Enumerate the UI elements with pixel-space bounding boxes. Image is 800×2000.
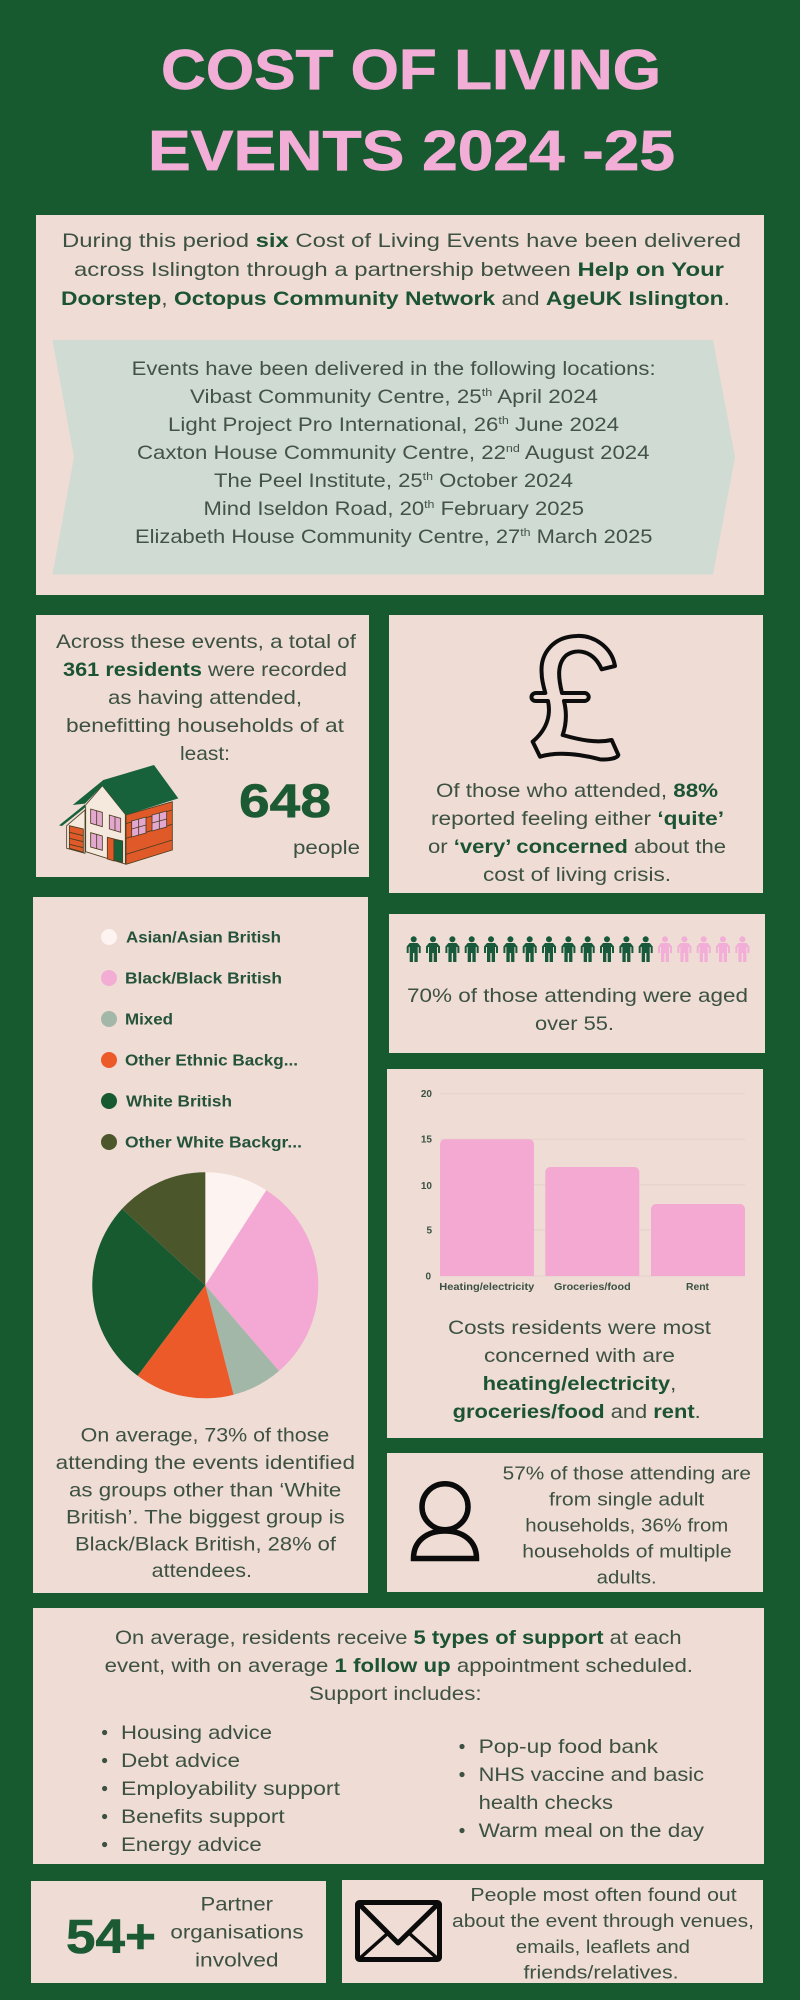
age text (407, 985, 748, 1035)
arrow banner: event locations: March 2025 (531, 526, 653, 548)
household text (503, 1462, 751, 1587)
concern text (428, 780, 726, 886)
support list: left column: Benefits support (121, 1806, 285, 1828)
found out text: friends/relatives. (524, 1962, 679, 1983)
support intro text: Support includes: (309, 1683, 482, 1705)
stat: 648 people: people (293, 837, 360, 859)
arrow banner: event locations: Vibast Community Centre, 25 (190, 386, 444, 408)
found out text: People most often found out (470, 1884, 737, 1905)
partner text (170, 1894, 304, 1972)
panel: household type (387, 1453, 763, 1592)
icon: person (414, 1484, 476, 1558)
support list: left column: Debt advice (121, 1750, 240, 1772)
ethnicity text: as groups other than ‘White (69, 1479, 341, 1501)
bar chart: Groceries/food (554, 1282, 631, 1293)
household text: households, 36% from (525, 1514, 728, 1535)
concern text: or ‘very’ concerned about the (428, 836, 726, 858)
panel: introduction and locations (36, 215, 764, 595)
panel: how people found out (342, 1880, 763, 1983)
bar chart: 15 (421, 1135, 432, 1146)
legend: Mixed (125, 1012, 173, 1028)
attendance text: Across these events, a total of (56, 631, 357, 653)
bar chart: Rent (686, 1282, 710, 1293)
arrow banner: event locations: th (520, 527, 531, 539)
support intro text: On average, residents receive 5 types of support at each (115, 1627, 682, 1649)
arrow banner: event locations: April 2024 (492, 386, 598, 408)
household text: adults. (597, 1566, 657, 1587)
ethnicity text: attending the events identified (56, 1452, 355, 1474)
support list: left column: Housing advice (121, 1722, 272, 1744)
concern text: Of those who attended, 88% (436, 780, 718, 802)
icon: pound sign (531, 636, 618, 759)
arrow banner: event locations: Elizabeth House Community Centre, 27 (135, 526, 478, 548)
support list: left column: Energy advice (121, 1834, 262, 1856)
costs text (448, 1317, 712, 1423)
arrow banner: event locations: th (482, 387, 492, 399)
partner text: involved (195, 1950, 279, 1972)
costs text: Costs residents were most (448, 1317, 712, 1339)
intro text: Doorstep , Octopus Community Network and AgeUK Islington . (61, 288, 730, 310)
bar chart: 0 (425, 1272, 431, 1283)
panel: concern about cost of living (389, 615, 763, 893)
arrow banner: event locations: th (498, 415, 509, 427)
household text: households of multiple (522, 1541, 732, 1562)
title: EVENTS 2024 -25 (148, 119, 675, 183)
arrow banner: event locations: th (424, 499, 434, 511)
intro text: across Islington through a partnership between Help on Your (74, 259, 724, 281)
arrow banner: event locations: th (423, 471, 433, 483)
costs text: heating/electricity , (483, 1373, 676, 1395)
legend: White British (126, 1094, 232, 1110)
bar chart (421, 1089, 745, 1293)
panel: residents attended (36, 615, 369, 877)
arrow banner: event locations: August 2024 (520, 442, 650, 464)
legend: Black/Black British (125, 970, 282, 988)
ethnicity text: On average, 73% of those (81, 1425, 329, 1447)
panel: partner organisations (31, 1881, 326, 1983)
support list: right column: Pop-up food bank (479, 1736, 658, 1758)
panel: ages over 55 (389, 914, 765, 1053)
attendance text: as having attended, (108, 687, 302, 709)
found out text (452, 1884, 754, 1983)
intro text (61, 230, 741, 310)
found out text: emails, leaflets and (516, 1936, 690, 1957)
ethnicity text (56, 1425, 355, 1582)
bar chart: 5 (426, 1226, 432, 1237)
arrow banner: event locations: Mind Iseldon Road, 20 (204, 498, 399, 520)
legend (101, 929, 302, 1152)
legend: Asian/Asian British (126, 930, 281, 946)
support intro text (105, 1627, 693, 1705)
concern text: cost of living crisis. (483, 864, 671, 886)
concern text: reported feeling either ‘quite’ (431, 808, 724, 830)
costs text: groceries/food and rent. (453, 1401, 701, 1423)
support list: left column (102, 1722, 341, 1856)
stat: 648 people (239, 774, 360, 859)
partner text: organisations (170, 1922, 304, 1944)
arrow banner: event locations: February 2025 (434, 498, 584, 520)
bar chart: 20 (421, 1089, 432, 1100)
attendance text: benefitting households of at (66, 715, 345, 737)
attendance text (56, 631, 357, 765)
arrow banner: event locations: October 2024 (433, 470, 573, 492)
attendance text: 361 residents were recorded (63, 659, 347, 681)
support list: right column: NHS vaccine and basic (479, 1764, 704, 1786)
panel: ethnicity (33, 897, 368, 1593)
intro text: During this period six Cost of Living Events have been delivered (62, 230, 741, 252)
support list: right column: Warm meal on the day (479, 1820, 704, 1842)
found out text: about the event through venues, (452, 1910, 754, 1931)
ethnicity text: British’. The biggest group is (66, 1506, 345, 1528)
arrow banner: event locations: June 2024 (509, 414, 619, 436)
partner text: Partner (200, 1894, 274, 1916)
icon: envelope (358, 1902, 440, 1960)
ethnicity text: Black/Black British, 28% of (75, 1533, 337, 1555)
stat: 54+: 54+ (66, 1911, 156, 1964)
pictogram: 13 of 18 people green (407, 936, 749, 962)
arrow banner: event locations: nd (506, 443, 520, 455)
arrow banner: event locations: The Peel Institute, 25 (214, 470, 398, 492)
title: COST OF LIVING (161, 38, 661, 102)
support list: right column: health checks (479, 1792, 613, 1814)
title (148, 38, 675, 183)
attendance text: least: (180, 743, 230, 765)
icon: house (59, 765, 178, 864)
age text: over 55. (535, 1013, 614, 1035)
arrow banner: event locations (52, 340, 735, 574)
costs text: concerned with are (484, 1345, 675, 1367)
age text: 70% of those attending were aged (407, 985, 748, 1007)
support list: left column: Employability support (121, 1778, 341, 1800)
arrow banner: event locations: Caxton House Community Centre, 22 (137, 442, 461, 464)
panel: support types (33, 1608, 764, 1864)
support list: right column (459, 1736, 704, 1842)
legend: Other White Backgr... (125, 1134, 302, 1152)
bar chart: 10 (421, 1181, 432, 1192)
stat: 648 people: 648 (239, 774, 331, 827)
ethnicity text: attendees. (152, 1560, 252, 1582)
arrow banner: event locations: Events have been delivered in the following locations: (132, 358, 656, 380)
support intro text: event, with on average 1 follow up appointment scheduled. (105, 1655, 693, 1677)
household text: from single adult (549, 1489, 704, 1510)
household text: 57% of those attending are (503, 1462, 751, 1483)
pie chart (92, 1172, 318, 1398)
bar chart: Heating/electricity (439, 1282, 535, 1293)
arrow banner: event locations: Light Project Pro International, 26 (168, 414, 457, 436)
panel: costs of concern (387, 1069, 763, 1438)
legend: Other Ethnic Backg... (125, 1052, 298, 1070)
